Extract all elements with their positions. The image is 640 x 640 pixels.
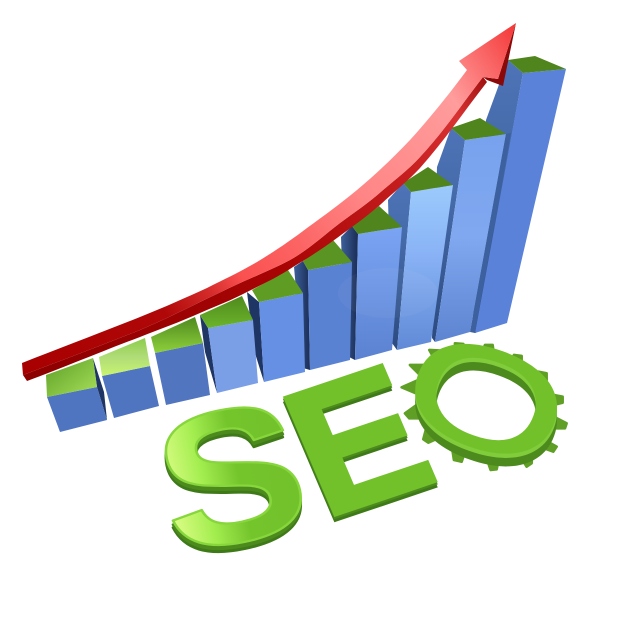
bar 6 xyxy=(294,240,352,370)
letter O: gear ring: O xyxy=(383,306,589,509)
red growth arrow xyxy=(22,23,516,381)
bar 1 xyxy=(46,358,107,432)
letter S: S xyxy=(138,358,325,595)
letter E: E xyxy=(258,328,458,557)
letter O: gear ring: O xyxy=(383,310,589,513)
bar 10: tallest xyxy=(472,56,566,333)
bar 4 xyxy=(200,296,258,393)
bar 7 xyxy=(341,206,402,360)
bar 2 xyxy=(99,338,159,418)
bar 5 xyxy=(247,270,305,382)
letter O: gear ring: O xyxy=(383,302,589,505)
letter O: gear ring: O xyxy=(383,297,589,500)
bar 9 xyxy=(432,118,511,342)
letter E: E xyxy=(258,331,458,560)
faint gear reflection on bars xyxy=(338,268,438,318)
letter E: E xyxy=(258,325,458,555)
bar 8 xyxy=(388,167,453,350)
letter S: S xyxy=(138,362,325,599)
bar 3 xyxy=(151,317,210,405)
gear teeth xyxy=(402,343,567,470)
letter S: S xyxy=(138,365,325,602)
